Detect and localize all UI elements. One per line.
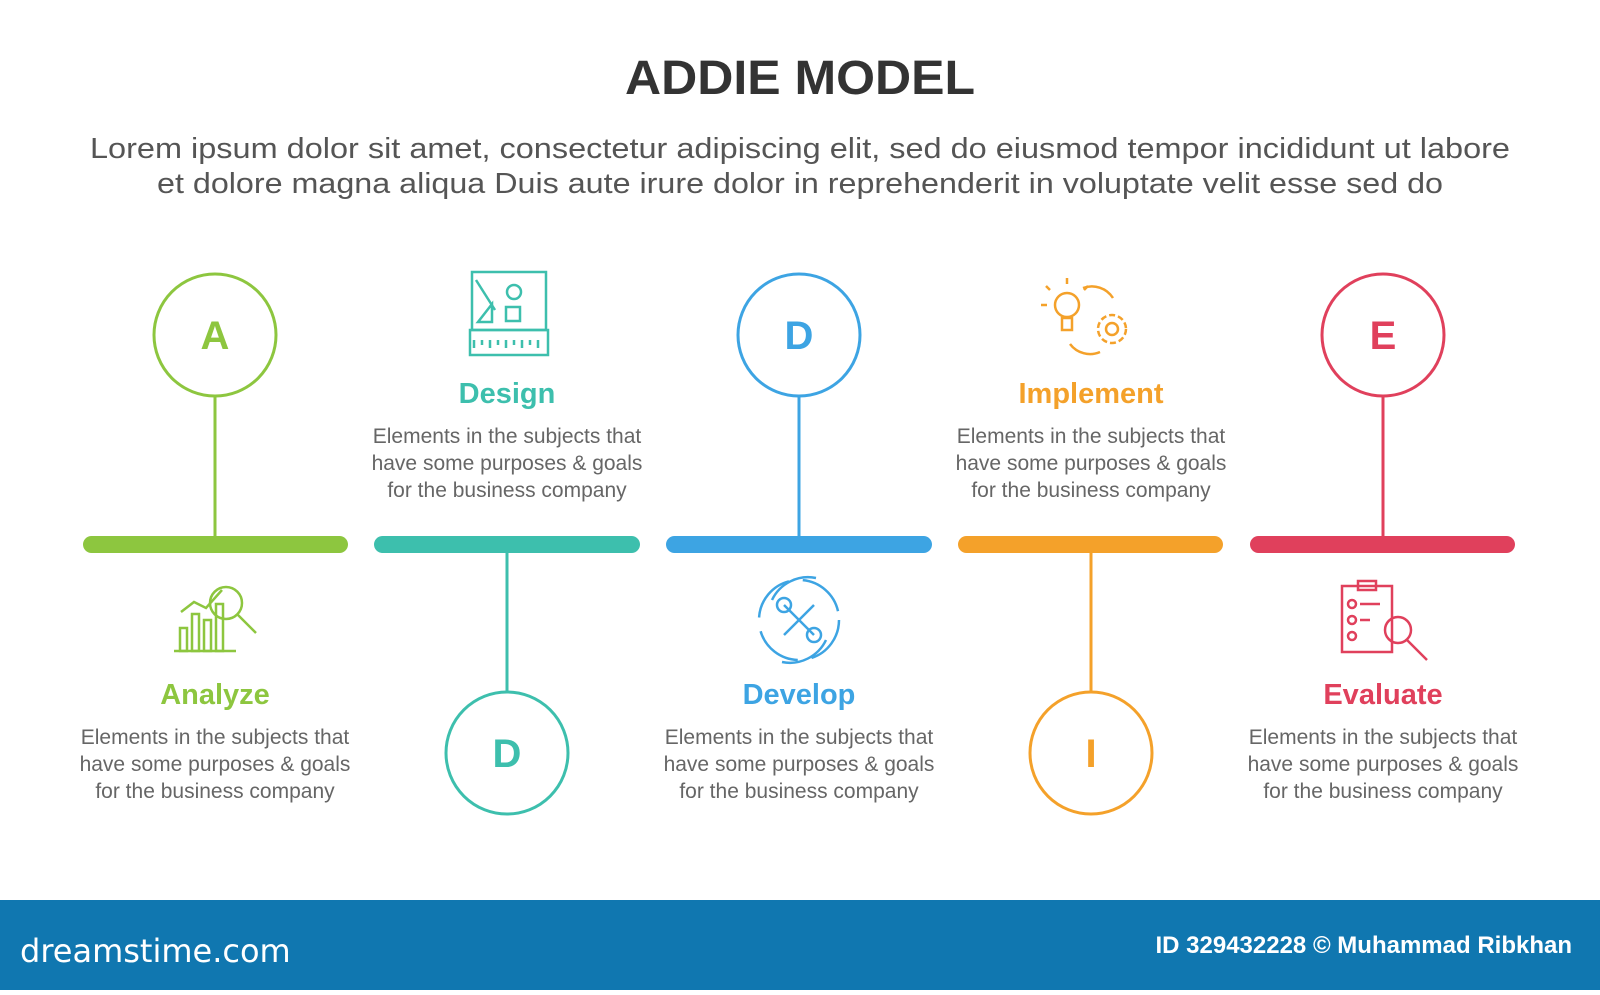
step: Implement: I	[1085, 732, 1097, 776]
step: Develop: D	[785, 314, 813, 358]
step: Implement	[956, 278, 1226, 814]
step: Analyze: A	[201, 314, 229, 358]
step: Implement: have some purposes & goals	[956, 452, 1226, 475]
step: Design: Elements in the subjects that	[373, 425, 641, 448]
step: Develop: for the business company	[679, 780, 919, 803]
step: Evaluate: have some purposes & goals	[1248, 753, 1518, 776]
step: Evaluate: for the business company	[1263, 780, 1503, 803]
step: Analyze: for the business company	[95, 780, 335, 803]
footer bar: ID 329432228 © Muhammad Ribkhan	[1155, 932, 1572, 959]
step: Evaluate	[1248, 274, 1518, 803]
step: Design: for the business company	[387, 479, 627, 502]
step: Analyze: Elements in the subjects that	[81, 726, 349, 749]
icon: clipboard magnifier	[1342, 581, 1427, 660]
step: Design: D	[493, 732, 521, 776]
subtitle: Lorem ipsum dolor sit amet, consectetur adipiscing elit, sed do eiusmod tempor incididunt ut labore	[90, 133, 1510, 165]
icon: tools cycle	[759, 577, 839, 663]
icon: blueprint	[470, 272, 548, 355]
step: Design: have some purposes & goals	[372, 452, 642, 475]
step: Implement: Elements in the subjects that	[957, 425, 1225, 448]
title: ADDIE MODEL	[625, 52, 975, 105]
step: Develop: Develop	[743, 679, 855, 711]
step: Implement: Implement	[1018, 378, 1164, 410]
footer bar: dreamstime.com	[20, 932, 291, 970]
step: Design: Design	[459, 378, 555, 410]
footer bar	[0, 900, 1600, 990]
icon: chart magnifier	[174, 587, 256, 651]
step: Evaluate: Evaluate	[1323, 679, 1443, 711]
step: Evaluate: E	[1370, 314, 1396, 358]
subtitle	[90, 133, 1510, 200]
icon: bulb and gear	[1041, 278, 1126, 354]
step: Develop: have some purposes & goals	[664, 753, 934, 776]
step: Design	[372, 272, 642, 814]
step: Analyze	[80, 274, 350, 803]
step: Implement: for the business company	[971, 479, 1211, 502]
step: Analyze: have some purposes & goals	[80, 753, 350, 776]
subtitle: et dolore magna aliqua Duis aute irure dolor in reprehenderit in voluptate velit esse sed do	[157, 168, 1443, 200]
step: Develop	[664, 274, 934, 803]
step: Develop: Elements in the subjects that	[665, 726, 933, 749]
step: Evaluate: Elements in the subjects that	[1249, 726, 1517, 749]
step: Analyze: Analyze	[160, 679, 270, 711]
